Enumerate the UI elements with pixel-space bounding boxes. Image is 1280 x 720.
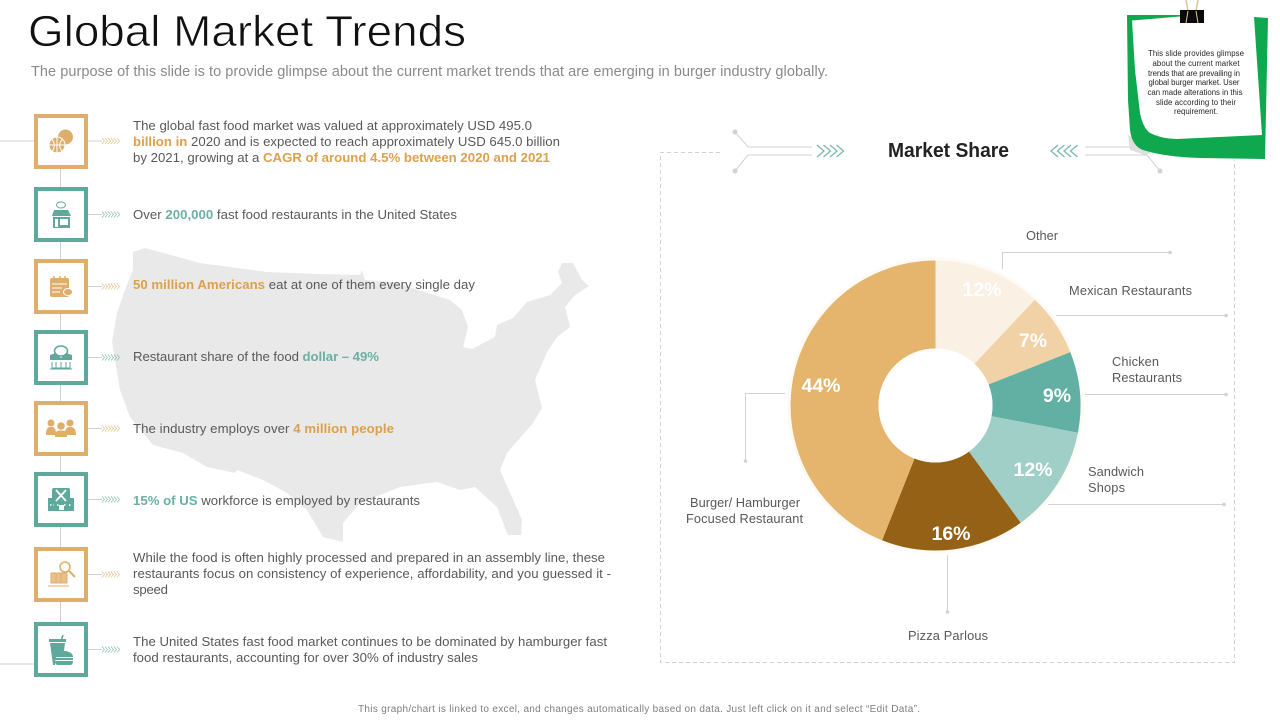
footnote: This graph/chart is linked to excel, and changes automatically based on data. Just left click on it and select “Edit Data”. <box>358 704 920 715</box>
category labels: Focused Restaurant <box>686 511 803 526</box>
note text: can made alterations in this <box>1148 88 1243 97</box>
note text: about the current market <box>1152 59 1240 68</box>
icon: three people <box>36 403 86 454</box>
title: Global Market Trends <box>28 7 466 56</box>
text: daily customers: 50 million Americans eat at one of them every single day <box>133 277 475 292</box>
icon: drink and burger <box>36 624 86 675</box>
note text: requirement. <box>1174 107 1218 116</box>
heading decoration: right connector <box>1051 132 1162 174</box>
text: hamburger dominance: food restaurants, accounting for over 30% of industry sales <box>133 650 478 665</box>
data labels: 12% <box>1013 459 1053 481</box>
note text: global burger market. User <box>1148 78 1240 87</box>
note text <box>1148 49 1244 116</box>
text: employment: The industry employs over 4 million people <box>133 421 394 436</box>
arrow: chevrons <box>88 212 120 218</box>
text: consistency: restaurants focus on consistency of experience, affordability, and you guessed it - <box>133 566 611 581</box>
icon: globe and coin <box>36 116 86 167</box>
text: hamburger dominance <box>133 634 607 665</box>
subtitle: The purpose of this slide is to provide glimpse about the current market trends that are emerging in burger industry globally. <box>31 64 828 80</box>
category labels <box>686 228 1192 643</box>
text: hamburger dominance: The United States fast food market continues to be dominated by hamburger fast <box>133 634 607 649</box>
category labels: Burger/ Hamburger <box>690 495 801 510</box>
row 8: hamburger dominance <box>36 624 607 675</box>
icon: magnifier over production line <box>36 549 86 600</box>
row 1: global market value <box>36 116 560 167</box>
panel: market share <box>660 130 1234 662</box>
map: United States silhouette <box>112 248 589 542</box>
category labels: Sandwich <box>1088 464 1144 479</box>
text: workforce: 15% of US workforce is employed by restaurants <box>133 493 420 508</box>
heading: market share: Market Share <box>888 140 1009 162</box>
row 6: workforce <box>36 474 420 525</box>
data labels: 44% <box>801 375 841 397</box>
panel border <box>660 152 1234 662</box>
leader lines <box>744 251 1228 614</box>
category labels: Restaurants <box>1112 370 1182 385</box>
icon: binder clip <box>1180 0 1204 23</box>
icon: storefront <box>36 189 86 240</box>
category labels: Shops <box>1088 480 1125 495</box>
timeline connector <box>0 141 60 664</box>
text: market value: billion in 2020 and is expected to reach approximately USD 645.0 billion <box>133 134 560 149</box>
arrow: chevrons <box>88 138 120 144</box>
arrow: chevrons <box>88 496 120 502</box>
text: market value: by 2021, growing at a CAGR of around 4.5% between 2020 and 2021 <box>133 150 550 165</box>
donut chart <box>788 258 1084 554</box>
text: food dollar share: Restaurant share of the food dollar – 49% <box>133 349 379 364</box>
heading decoration: left connector <box>732 130 844 174</box>
icon: restaurant counter <box>36 332 86 383</box>
category labels: Pizza Parlous <box>908 628 988 643</box>
arrow: chevrons <box>88 572 120 578</box>
category labels: Other <box>1026 228 1059 243</box>
arrow: chevrons <box>88 354 120 360</box>
icon: calendar <box>36 261 86 312</box>
row 4: food dollar share <box>36 332 379 383</box>
row 7: consistency <box>36 549 611 600</box>
data labels <box>801 279 1071 545</box>
arrow: chevrons <box>88 284 120 290</box>
note text: slide according to their <box>1156 98 1236 107</box>
text: market value <box>133 118 560 165</box>
text: consistency: speed <box>133 582 168 597</box>
text: market value: The global fast food market was valued at approximately USD 495.0 <box>133 118 532 133</box>
row 3: daily customers <box>36 261 475 312</box>
arrow: chevrons <box>88 426 120 432</box>
data labels: 7% <box>1019 330 1047 352</box>
category labels: Chicken <box>1112 354 1159 369</box>
note text: This slide provides glimpse <box>1148 49 1244 58</box>
icon: restaurant with cutlery <box>36 474 86 525</box>
data labels: 16% <box>931 523 971 545</box>
text: consistency: While the food is often highly processed and prepared in an assembly line, these <box>133 550 605 565</box>
data labels: 12% <box>962 279 1002 301</box>
text: consistency <box>133 550 611 597</box>
arrow: chevrons <box>88 646 120 652</box>
list: market facts <box>36 116 611 675</box>
data labels: 9% <box>1043 385 1071 407</box>
text: restaurant count: Over 200,000 fast food restaurants in the United States <box>133 207 457 222</box>
row 2: restaurant count <box>36 189 457 240</box>
row 5: employment <box>36 403 394 454</box>
callout: sticky note <box>1127 0 1268 159</box>
category labels: Mexican Restaurants <box>1069 283 1192 298</box>
note text: trends that are prevailing in <box>1148 69 1240 78</box>
